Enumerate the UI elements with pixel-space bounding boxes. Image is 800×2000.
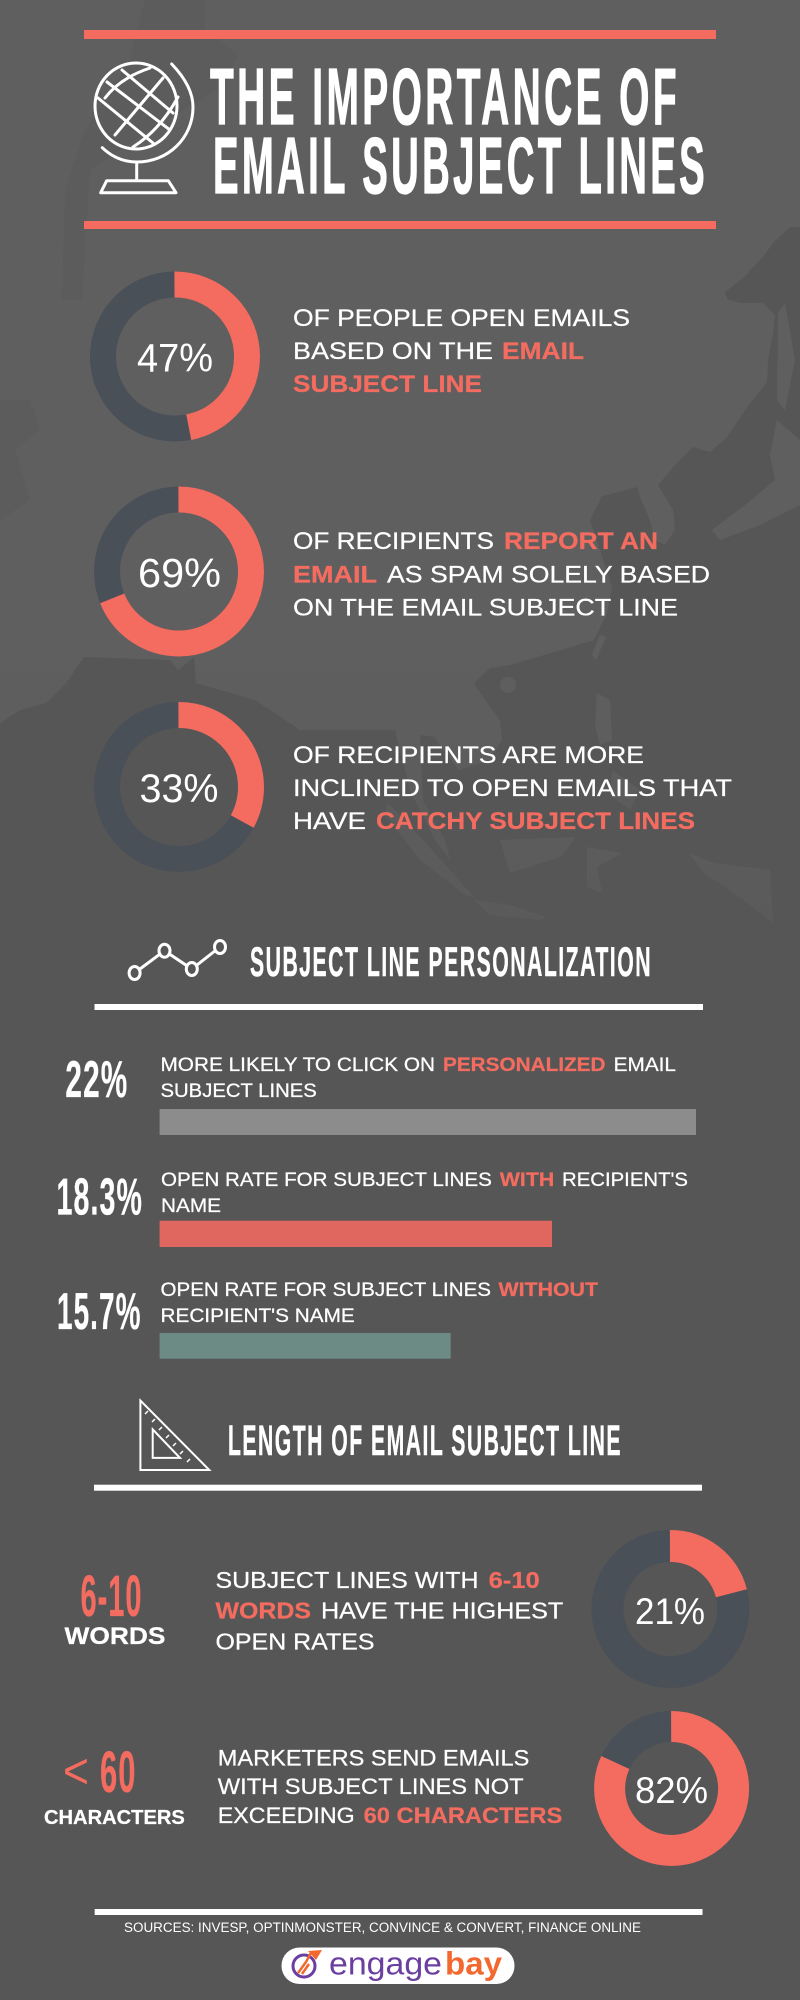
text block: 47% statement: OF PEOPLE OPEN EMAILS bbox=[293, 305, 630, 332]
donut chart: 47%: 47% bbox=[137, 336, 213, 380]
title bbox=[210, 52, 708, 210]
text block: 33% statement: HAVE bbox=[293, 808, 366, 835]
text block: personalized: EMAIL bbox=[614, 1055, 676, 1076]
footer divider bbox=[95, 1909, 702, 1915]
bar: 15.7% bbox=[160, 1333, 451, 1359]
text block: 69% statement: OF RECIPIENTS bbox=[293, 528, 494, 555]
donut chart: 47% bbox=[103, 284, 247, 428]
bar: 22% bbox=[160, 1109, 696, 1135]
logo: engagebay: engage bbox=[329, 1946, 442, 1982]
text block: with recipient's name: RECIPIENT'S bbox=[562, 1170, 688, 1191]
stat: 15.7%: 15.7% bbox=[57, 1283, 142, 1341]
text block: 69% statement bbox=[293, 528, 710, 622]
text block: 60 characters: MARKETERS SEND EMAILS bbox=[218, 1745, 529, 1770]
donut chart: 21%: 21% bbox=[635, 1591, 705, 1632]
header bottom bar bbox=[84, 221, 716, 229]
section divider bbox=[94, 1004, 703, 1010]
text block: 6-10 words: OPEN RATES bbox=[216, 1629, 374, 1655]
text block: with recipient's name: WITH bbox=[500, 1170, 554, 1191]
text block: personalized: PERSONALIZED bbox=[443, 1055, 606, 1076]
donut chart: 69% bbox=[107, 500, 251, 644]
donut chart: 33% bbox=[107, 715, 251, 859]
text block: 33% statement: OF RECIPIENTS ARE MORE bbox=[293, 742, 644, 769]
text block: with recipient's name bbox=[161, 1170, 688, 1217]
text block: personalized bbox=[160, 1055, 676, 1102]
donut chart: 82% bbox=[610, 1726, 734, 1850]
donut chart: 33%: 33% bbox=[140, 767, 218, 811]
icon: globe bbox=[95, 63, 193, 193]
stat: under 60 characters: 60 bbox=[100, 1740, 136, 1805]
text block: without recipient's name: OPEN RATE FOR SUBJECT LINES bbox=[160, 1280, 491, 1301]
stat: 18.3%: 18.3% bbox=[56, 1169, 143, 1227]
text block: 6-10 words: 6-10 bbox=[489, 1567, 540, 1593]
text block: 6-10 words bbox=[216, 1567, 563, 1655]
donut chart: 82%: 82% bbox=[635, 1770, 708, 1811]
text block: with recipient's name: NAME bbox=[161, 1196, 221, 1217]
text block: 47% statement bbox=[293, 305, 630, 398]
stat: 6-10 words: WORDS bbox=[64, 1623, 166, 1650]
section divider bbox=[94, 1485, 702, 1491]
sources: SOURCES: INVESP, OPTINMONSTER, CONVINCE & CONVERT, FINANCE ONLINE bbox=[124, 1920, 641, 1935]
text block: without recipient's name: WITHOUT bbox=[498, 1280, 598, 1301]
text block: 47% statement: EMAIL bbox=[502, 338, 584, 365]
logo: engagebay bbox=[282, 1946, 514, 1984]
text block: 33% statement: CATCHY SUBJECT LINES bbox=[376, 808, 695, 835]
text block: 60 characters: 60 CHARACTERS bbox=[364, 1803, 562, 1828]
stat: under 60 characters: < bbox=[63, 1743, 89, 1799]
text block: 60 characters bbox=[218, 1745, 562, 1828]
text block: 33% statement bbox=[293, 742, 732, 835]
stat: 6-10 words: 6-10 bbox=[80, 1564, 142, 1629]
text block: personalized: MORE LIKELY TO CLICK ON bbox=[160, 1055, 435, 1076]
text block: with recipient's name: OPEN RATE FOR SUBJECT LINES bbox=[161, 1170, 492, 1191]
text block: 6-10 words: WORDS bbox=[216, 1598, 311, 1624]
logo: engagebay: bay bbox=[445, 1946, 502, 1982]
text block: 6-10 words: HAVE THE HIGHEST bbox=[321, 1598, 563, 1624]
text block: without recipient's name bbox=[160, 1280, 598, 1327]
stat: under 60 characters bbox=[44, 1740, 185, 1829]
text block: 33% statement: INCLINED TO OPEN EMAILS THAT bbox=[293, 775, 732, 802]
text block: 69% statement: EMAIL bbox=[293, 562, 377, 588]
text block: 69% statement: AS SPAM SOLELY BASED bbox=[387, 562, 710, 588]
text block: 47% statement: BASED ON THE bbox=[293, 338, 493, 365]
icon: set square bbox=[140, 1400, 209, 1470]
text block: 69% statement: REPORT AN bbox=[504, 528, 658, 555]
text block: 6-10 words: SUBJECT LINES WITH bbox=[216, 1567, 478, 1593]
donut chart: 69%: 69% bbox=[138, 550, 221, 596]
text block: without recipient's name: RECIPIENT'S NAME bbox=[160, 1306, 355, 1327]
stat: 6-10 words bbox=[64, 1564, 166, 1650]
text block: 60 characters: WITH SUBJECT LINES NOT bbox=[218, 1774, 524, 1799]
donut chart: 21% bbox=[607, 1546, 733, 1672]
header top bar bbox=[84, 30, 716, 39]
text block: 60 characters: EXCEEDING bbox=[218, 1803, 355, 1828]
text block: 69% statement: ON THE EMAIL SUBJECT LINE bbox=[293, 594, 678, 622]
bar: 18.3% bbox=[160, 1221, 552, 1247]
text block: 47% statement: SUBJECT LINE bbox=[293, 371, 482, 398]
text block: personalized: SUBJECT LINES bbox=[160, 1081, 317, 1102]
icon: line chart bbox=[129, 940, 226, 980]
stat: under 60 characters: CHARACTERS bbox=[44, 1807, 185, 1829]
stat: 22%: 22% bbox=[65, 1051, 128, 1109]
